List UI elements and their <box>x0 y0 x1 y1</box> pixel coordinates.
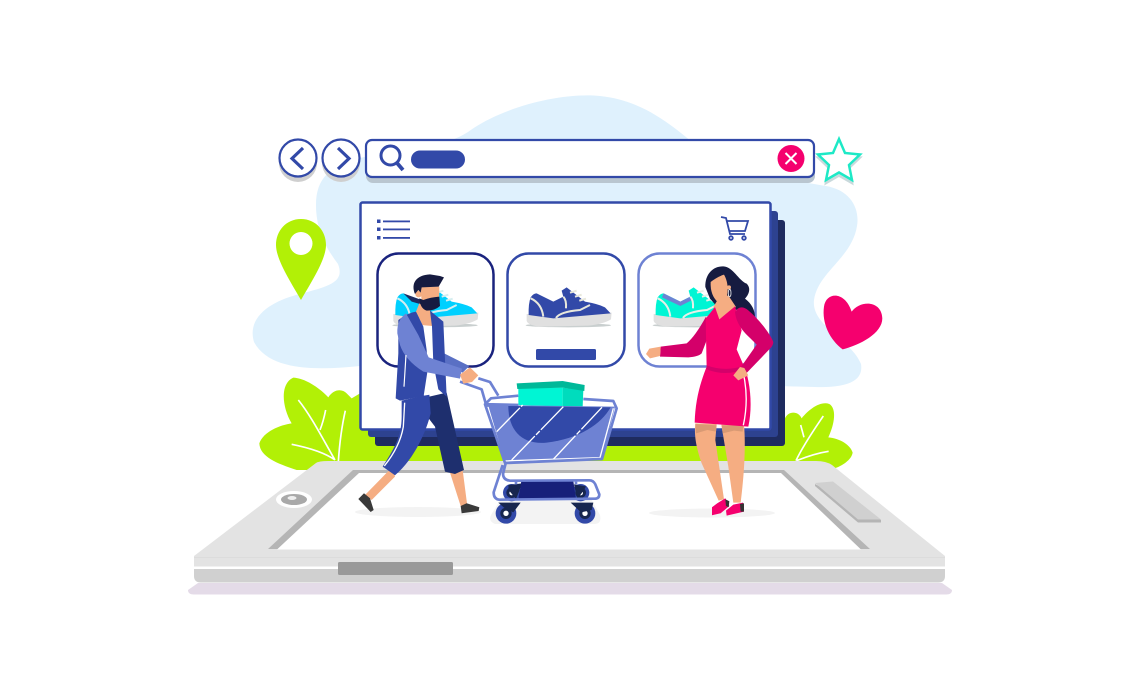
tablet home button <box>338 562 453 575</box>
man far sleeve <box>443 353 469 373</box>
search bar <box>366 140 814 177</box>
back layer mid <box>368 211 778 437</box>
back button <box>279 140 317 182</box>
cart handle <box>460 378 498 404</box>
icon: star <box>818 139 860 183</box>
cart front wheels <box>496 503 595 524</box>
tablet top surface <box>194 461 945 567</box>
search text placeholder <box>411 150 465 168</box>
tablet screen <box>277 473 861 550</box>
tablet front edge <box>194 569 945 582</box>
background blob <box>253 95 861 387</box>
shadow: man <box>355 507 481 517</box>
man legs <box>365 467 467 506</box>
woman far arm <box>660 317 709 357</box>
man near leg <box>383 394 431 475</box>
tablet device <box>194 461 945 582</box>
icon: magnifier <box>381 146 403 170</box>
icon: menu list <box>377 220 410 240</box>
woman near arm <box>735 307 773 374</box>
back layer dark <box>375 220 785 446</box>
woman hand left <box>646 347 661 358</box>
woman earring <box>728 289 731 297</box>
shoe box <box>517 381 585 407</box>
man jacket right panel <box>430 311 447 397</box>
woman torso <box>706 306 745 373</box>
cart lower frame <box>494 463 599 500</box>
woman skirt <box>695 365 751 427</box>
man far leg <box>427 393 464 474</box>
icon: clear button <box>778 145 804 172</box>
man upper body <box>396 274 478 401</box>
cart basket <box>485 396 617 463</box>
cart rear wheels <box>503 483 589 501</box>
green ground band <box>345 430 795 464</box>
shoe: blue <box>526 287 612 327</box>
man neck <box>416 303 433 327</box>
icon: location pin <box>276 219 326 300</box>
tablet side slot <box>815 482 881 522</box>
tablet base shadow <box>188 583 952 594</box>
plant: left <box>259 378 380 470</box>
man shoes <box>358 493 479 513</box>
woman hair <box>705 266 755 317</box>
tablet screen bezel <box>268 470 870 549</box>
man lower body <box>358 393 479 513</box>
woman ear <box>727 285 731 289</box>
woman face <box>711 275 728 303</box>
product card 1 <box>378 254 494 366</box>
address bar row <box>279 139 860 183</box>
icon: shopping cart <box>721 217 748 240</box>
tablet camera <box>276 491 312 508</box>
man head <box>414 274 444 311</box>
shoe: teal <box>653 287 739 327</box>
shopping cart <box>460 378 617 524</box>
woman neck <box>713 295 736 319</box>
woman upper body <box>646 266 773 380</box>
man hand <box>460 367 478 384</box>
plant: right <box>785 403 853 468</box>
woman belt <box>707 365 745 373</box>
man jacket left panel <box>396 312 428 401</box>
card button <box>536 349 596 360</box>
woman <box>646 266 773 516</box>
woman shoes <box>712 498 744 516</box>
man jacket stripe <box>404 355 406 387</box>
product card 2 <box>508 254 624 366</box>
search bar shadow <box>366 146 815 183</box>
browser window stack <box>360 202 785 446</box>
browser front panel <box>360 202 770 430</box>
cart lower tray <box>518 481 576 499</box>
woman lower body <box>695 365 751 516</box>
man near sleeve <box>397 313 462 379</box>
man shirt <box>421 325 438 396</box>
forward button <box>322 140 360 182</box>
product card 3 <box>638 254 756 366</box>
man pushing cart <box>358 274 479 513</box>
woman legs <box>695 423 745 503</box>
woman hand right <box>733 367 748 380</box>
shadow: cart <box>490 497 600 524</box>
shadow: woman <box>649 508 775 518</box>
shoe: cyan <box>392 287 478 327</box>
icon: heart <box>824 296 882 349</box>
